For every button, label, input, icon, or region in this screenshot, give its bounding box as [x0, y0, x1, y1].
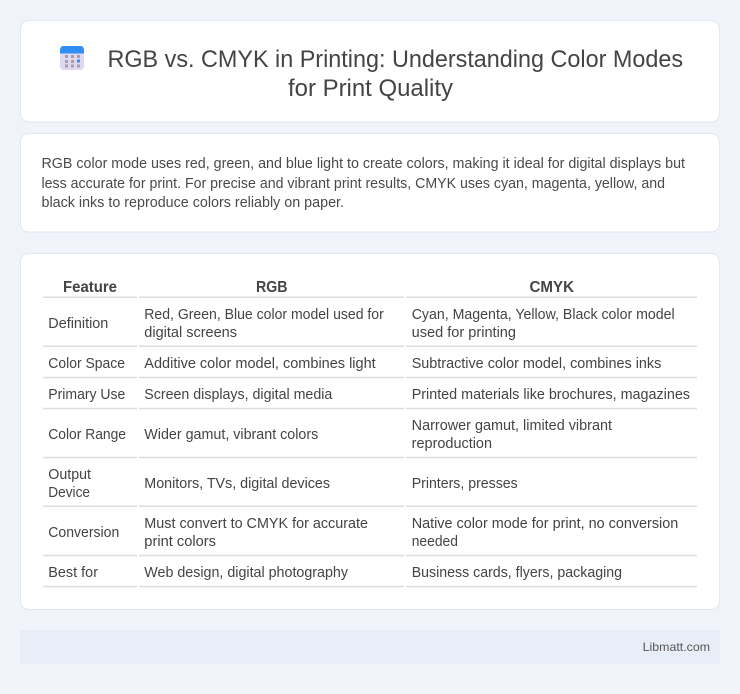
table row: Conversion: needed	[412, 534, 458, 550]
footer bar	[20, 630, 720, 664]
table row: Output Device: Device	[48, 485, 90, 501]
table row: Color Range: Wider gamut, vibrant colors	[144, 427, 318, 443]
table header row	[43, 279, 697, 298]
table row: Definition: Cyan, Magenta, Yellow, Black color model	[412, 307, 675, 323]
table row: Best for: Business cards, flyers, packaging	[412, 565, 622, 581]
table row: Color Space: Additive color model, combines light	[144, 356, 376, 372]
panel: title card	[20, 20, 720, 122]
table row: Primary Use: Primary Use	[48, 387, 125, 403]
table row: Definition: used for printing	[412, 325, 516, 341]
text block: intro paragraph	[42, 155, 686, 211]
text block: intro paragraph: RGB color mode uses red, green, and blue light to create colors, making it ideal for digital displays but	[42, 155, 686, 172]
table header row: CMYK	[530, 279, 574, 296]
table row: Output Device: Printers, presses	[412, 476, 518, 492]
title: RGB vs. CMYK in Printing: Understanding Color Modes	[108, 46, 683, 73]
table header row: Feature	[63, 279, 117, 296]
panel: comparison table	[20, 254, 720, 610]
table row: Conversion: print colors	[144, 534, 216, 550]
table row: Conversion: Must convert to CMYK for accurate	[144, 516, 368, 532]
table row: Conversion: Native color mode for print, no conversion	[412, 516, 678, 532]
table row: Output Device	[43, 467, 697, 507]
footer credit: Libmatt.com	[643, 640, 710, 654]
text block: intro paragraph: black inks to reproduce colors reliably on paper.	[42, 194, 344, 211]
table row: Definition	[43, 307, 697, 347]
table row: Definition: Red, Green, Blue color model used for	[144, 307, 384, 323]
panel: introduction	[20, 134, 720, 232]
table row: Primary Use	[43, 387, 697, 409]
table row: Conversion	[43, 516, 697, 556]
table row: Color Space: Subtractive color model, combines inks	[412, 356, 661, 372]
text block: intro paragraph: less accurate for print. For precise and vibrant print results, CMYK uses cyan, magenta, yellow, and	[42, 175, 665, 192]
table header row: RGB	[256, 279, 288, 296]
title	[108, 46, 683, 102]
table row: Best for: Best for	[48, 565, 98, 581]
table row: Definition: Definition	[48, 316, 108, 332]
table row: Color Space: Color Space	[48, 356, 125, 372]
title: for Print Quality	[288, 75, 453, 102]
table row: Color Range: Color Range	[48, 427, 126, 443]
table row: Best for	[43, 565, 697, 587]
table row: Primary Use: Printed materials like brochures, magazines	[412, 387, 690, 403]
table row: Color Range	[43, 418, 697, 458]
icon: calendar palette grid	[60, 46, 84, 70]
table row: Color Range: Narrower gamut, limited vibrant	[412, 418, 612, 434]
table row: Primary Use: Screen displays, digital media	[144, 387, 332, 403]
table row: Color Space	[43, 356, 697, 378]
table row: Best for: Web design, digital photography	[144, 565, 349, 581]
table row: Output Device: Output	[48, 467, 91, 483]
table row: Definition: digital screens	[144, 325, 237, 341]
table row: Output Device: Monitors, TVs, digital devices	[144, 476, 330, 492]
table row: Color Range: reproduction	[412, 436, 492, 452]
table row: Conversion: Conversion	[48, 525, 119, 541]
